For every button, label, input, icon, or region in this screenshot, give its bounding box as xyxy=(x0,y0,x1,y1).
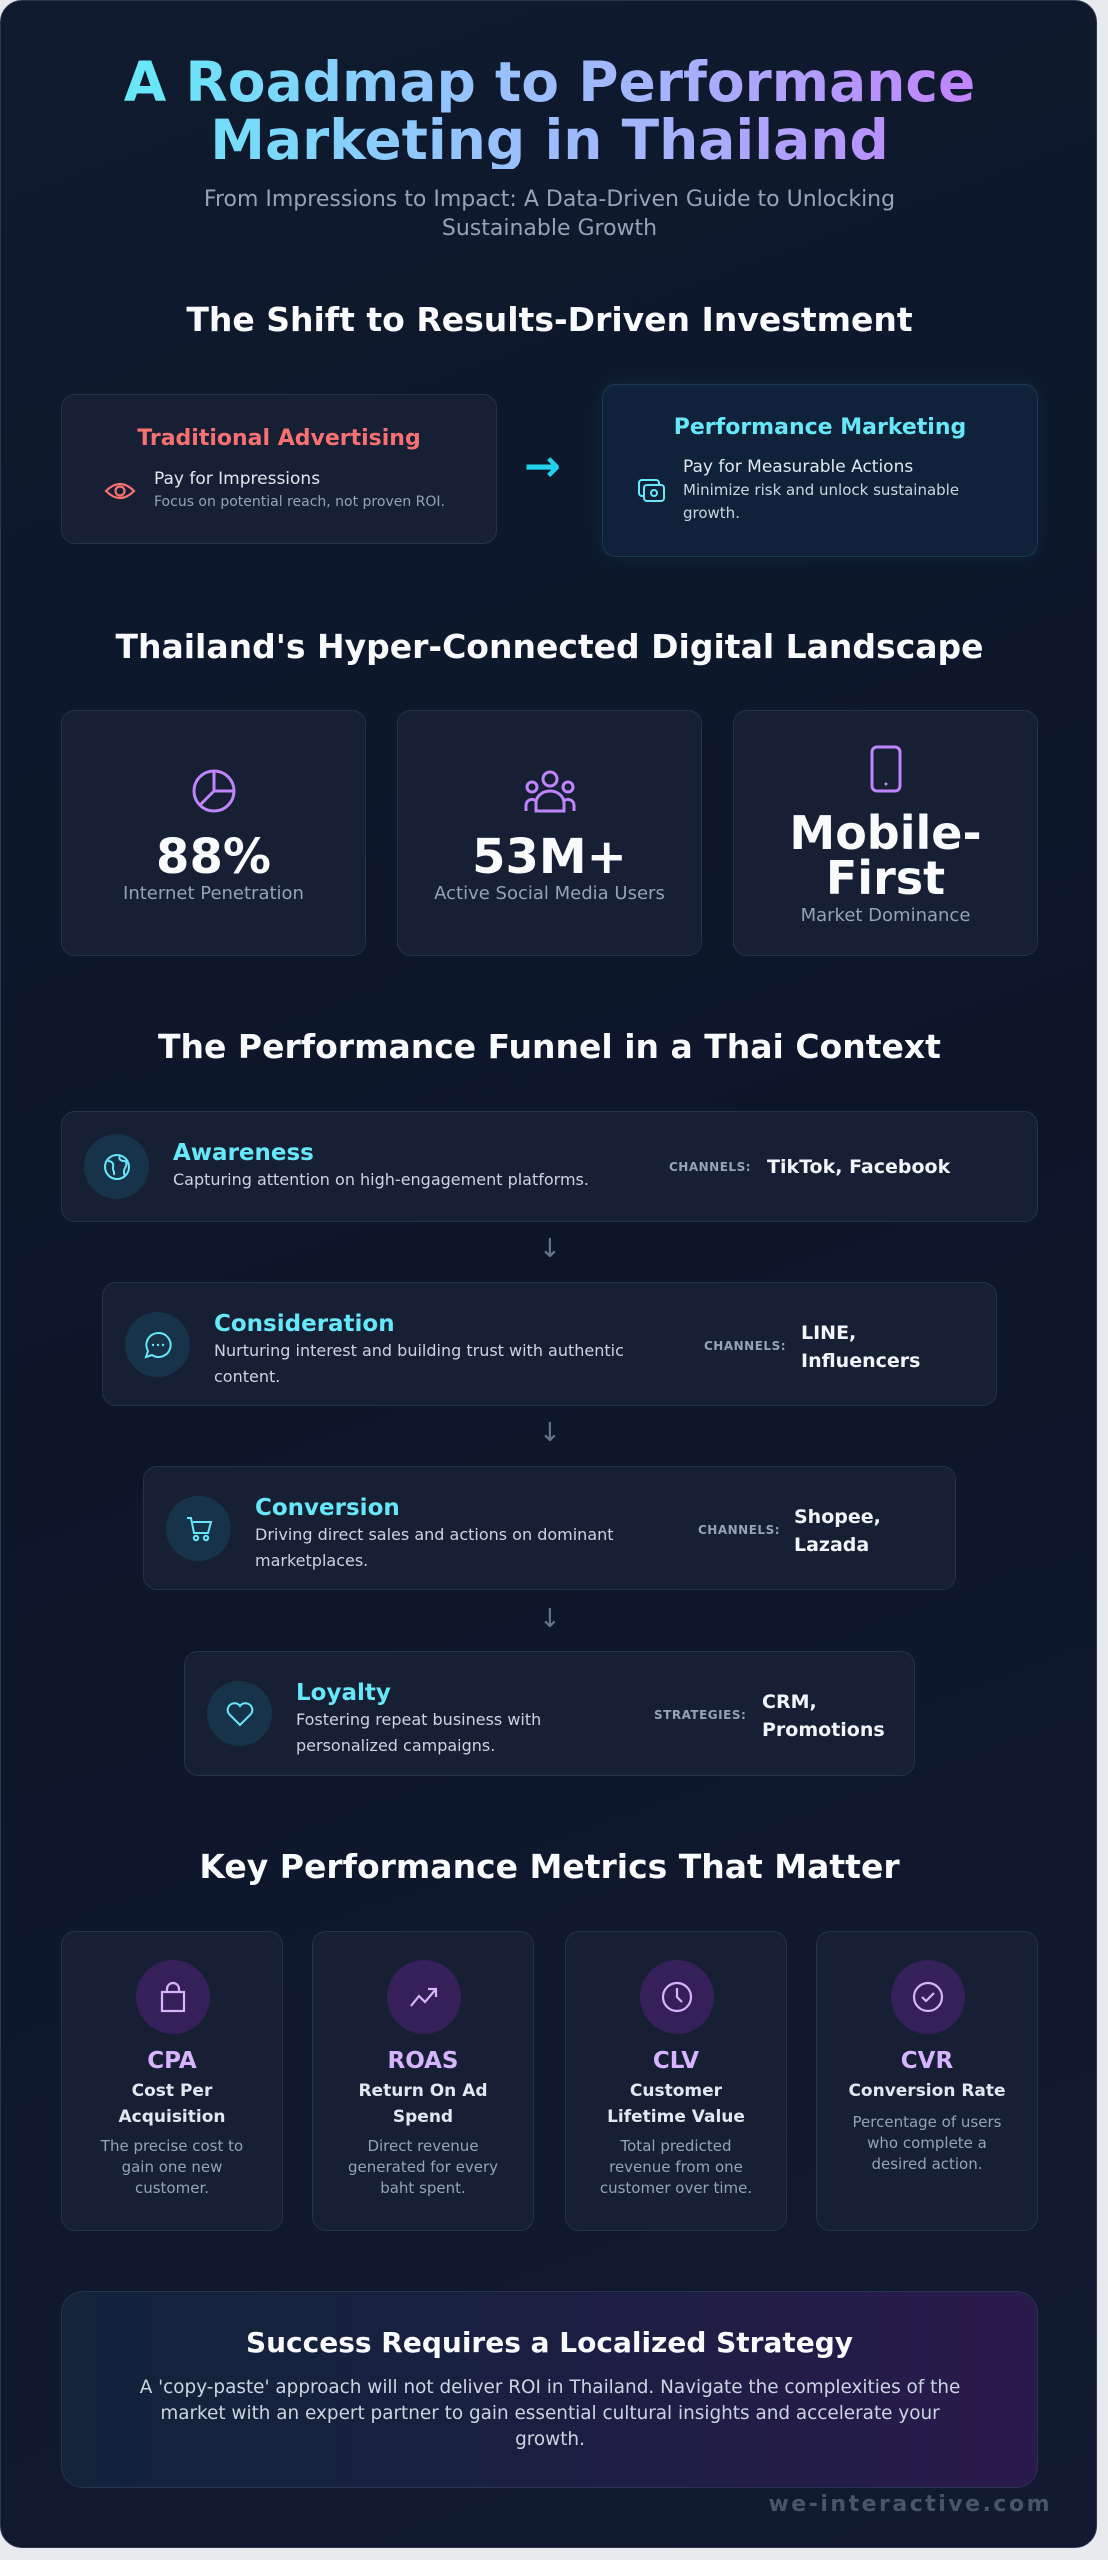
stat label: Internet Penetration xyxy=(123,883,304,904)
metric: CVR: Conversion Rate xyxy=(848,2081,1006,2101)
stat label: Active Social Media Users xyxy=(434,883,665,904)
panel: awareness: TikTok, Facebook xyxy=(767,1156,950,1178)
stat value: 53M+ xyxy=(472,829,627,885)
panel: mobile first xyxy=(733,710,1038,956)
icon: trend xyxy=(387,1960,461,2034)
heading: shift: The Shift to Results-Driven Investment xyxy=(186,300,913,339)
icon: clock xyxy=(640,1960,714,2034)
metric: CPA: Acquisition xyxy=(118,2107,226,2127)
panel: conversion: Driving direct sales and actions on dominant marketplaces. xyxy=(255,1525,614,1570)
icon: phone xyxy=(870,746,902,792)
conversion text: Conversion xyxy=(255,1495,400,1521)
stat label: Market Dominance xyxy=(801,905,970,926)
icon: cart xyxy=(166,1496,231,1561)
arrow: ↓ xyxy=(539,1234,561,1264)
metric: CPA: CPA xyxy=(147,2048,197,2074)
heading: funnel: The Performance Funnel in a Thai Context xyxy=(158,1027,941,1066)
strategies: STRATEGIES: xyxy=(654,1708,746,1722)
metric: ROAS: Spend xyxy=(393,2107,453,2127)
traditional text: Pay for Impressions xyxy=(154,469,320,489)
panel: consideration xyxy=(102,1282,997,1406)
traditional text xyxy=(154,469,445,510)
consideration text: Consideration xyxy=(214,1311,395,1337)
footer: brand: we-interactive.com xyxy=(768,2492,1052,2517)
metric: CLV: CLV xyxy=(653,2048,699,2074)
loyalty text: Loyalty xyxy=(296,1680,391,1706)
callout text: A 'copy-paste' approach will not deliver ROI in Thailand. Navigate the complexities of the market with an expert partner to gain essential cultural insights and accelerate your growth. xyxy=(140,2377,960,2450)
traditional text: Focus on potential reach, not proven ROI. xyxy=(154,494,445,510)
panel: loyalty: Promotions xyxy=(762,1719,885,1741)
panel: consideration: LINE, xyxy=(801,1322,856,1344)
metric: ROAS: ROAS xyxy=(387,2048,458,2074)
metric: ROAS: Return On Ad xyxy=(358,2081,488,2101)
title xyxy=(1,53,1098,169)
heading: metrics: Key Performance Metrics That Matter xyxy=(199,1847,900,1886)
metric: ROAS xyxy=(312,1931,534,2231)
metric: CLV: Lifetime Value xyxy=(607,2107,745,2127)
panel: consideration: Influencers xyxy=(801,1350,920,1372)
arrow: ↓ xyxy=(539,1418,561,1448)
awareness text: Awareness xyxy=(173,1140,314,1166)
channels: CHANNELS: xyxy=(698,1523,780,1537)
icon: globe xyxy=(84,1134,149,1199)
title: A Roadmap to Performance xyxy=(124,50,975,114)
icon: chat xyxy=(125,1312,190,1377)
heading: landscape: Thailand's Hyper-Connected Digital Landscape xyxy=(115,627,984,666)
arrow: ↓ xyxy=(539,1604,561,1634)
performance text: Minimize risk and unlock sustainable growth. xyxy=(683,481,959,522)
icon: pie xyxy=(192,770,236,812)
metric: CVR xyxy=(816,1931,1038,2231)
callout heading: Success Requires a Localized Strategy xyxy=(246,2326,853,2359)
stat value: First xyxy=(826,851,945,905)
panel: conversion xyxy=(143,1466,956,1590)
subtitle: From Impressions to Impact: A Data-Driven Guide to Unlocking Sustainable Growth xyxy=(204,187,895,241)
metric: CPA: The precise cost to gain one new customer. xyxy=(101,2137,243,2197)
metric: CPA: Cost Per xyxy=(132,2081,212,2101)
panel: internet penetration xyxy=(61,710,366,956)
panel: social users xyxy=(397,710,702,956)
channels: CHANNELS: xyxy=(669,1160,751,1174)
panel: conversion: Lazada xyxy=(794,1534,869,1556)
metric: CPA xyxy=(61,1931,283,2231)
icon: bag xyxy=(136,1960,210,2034)
metric: CLV: Customer xyxy=(630,2081,722,2101)
performance heading: Performance Marketing xyxy=(674,415,966,440)
icon: heart xyxy=(207,1681,272,1746)
panel: loyalty: Fostering repeat business with personalized campaigns. xyxy=(296,1710,541,1755)
panel: traditional advertising xyxy=(61,394,497,544)
metric: ROAS: Direct revenue generated for every baht spent. xyxy=(348,2137,498,2197)
icon: check xyxy=(891,1960,965,2034)
stat value: 88% xyxy=(156,829,271,885)
performance text: Pay for Measurable Actions xyxy=(683,457,913,477)
callout: localized strategy xyxy=(61,2291,1038,2488)
panel: loyalty: CRM, xyxy=(762,1691,817,1713)
performance text xyxy=(683,457,959,522)
panel: loyalty xyxy=(184,1651,915,1776)
metric: CVR: Percentage of users who complete a desired action. xyxy=(853,2113,1001,2173)
panel: conversion: Shopee, xyxy=(794,1506,881,1528)
stat value: Mobile- xyxy=(789,806,982,860)
arrow: → xyxy=(524,441,561,492)
panel: awareness xyxy=(61,1111,1038,1222)
panel: performance marketing xyxy=(602,384,1038,557)
panel: awareness: Capturing attention on high-engagement platforms. xyxy=(173,1170,589,1189)
panel: consideration: Nurturing interest and building trust with authentic content. xyxy=(214,1341,624,1386)
metric: CLV xyxy=(565,1931,787,2231)
title: Marketing in Thailand xyxy=(210,108,889,172)
metric: CLV: Total predicted revenue from one customer over time. xyxy=(600,2137,752,2197)
metric: CVR: CVR xyxy=(901,2048,953,2074)
icon: users xyxy=(524,770,576,812)
channels: CHANNELS: xyxy=(704,1339,786,1353)
icon: eye xyxy=(104,482,136,500)
stat value xyxy=(789,806,982,905)
traditional heading: Traditional Advertising xyxy=(137,426,421,451)
icon: cash xyxy=(638,479,665,502)
